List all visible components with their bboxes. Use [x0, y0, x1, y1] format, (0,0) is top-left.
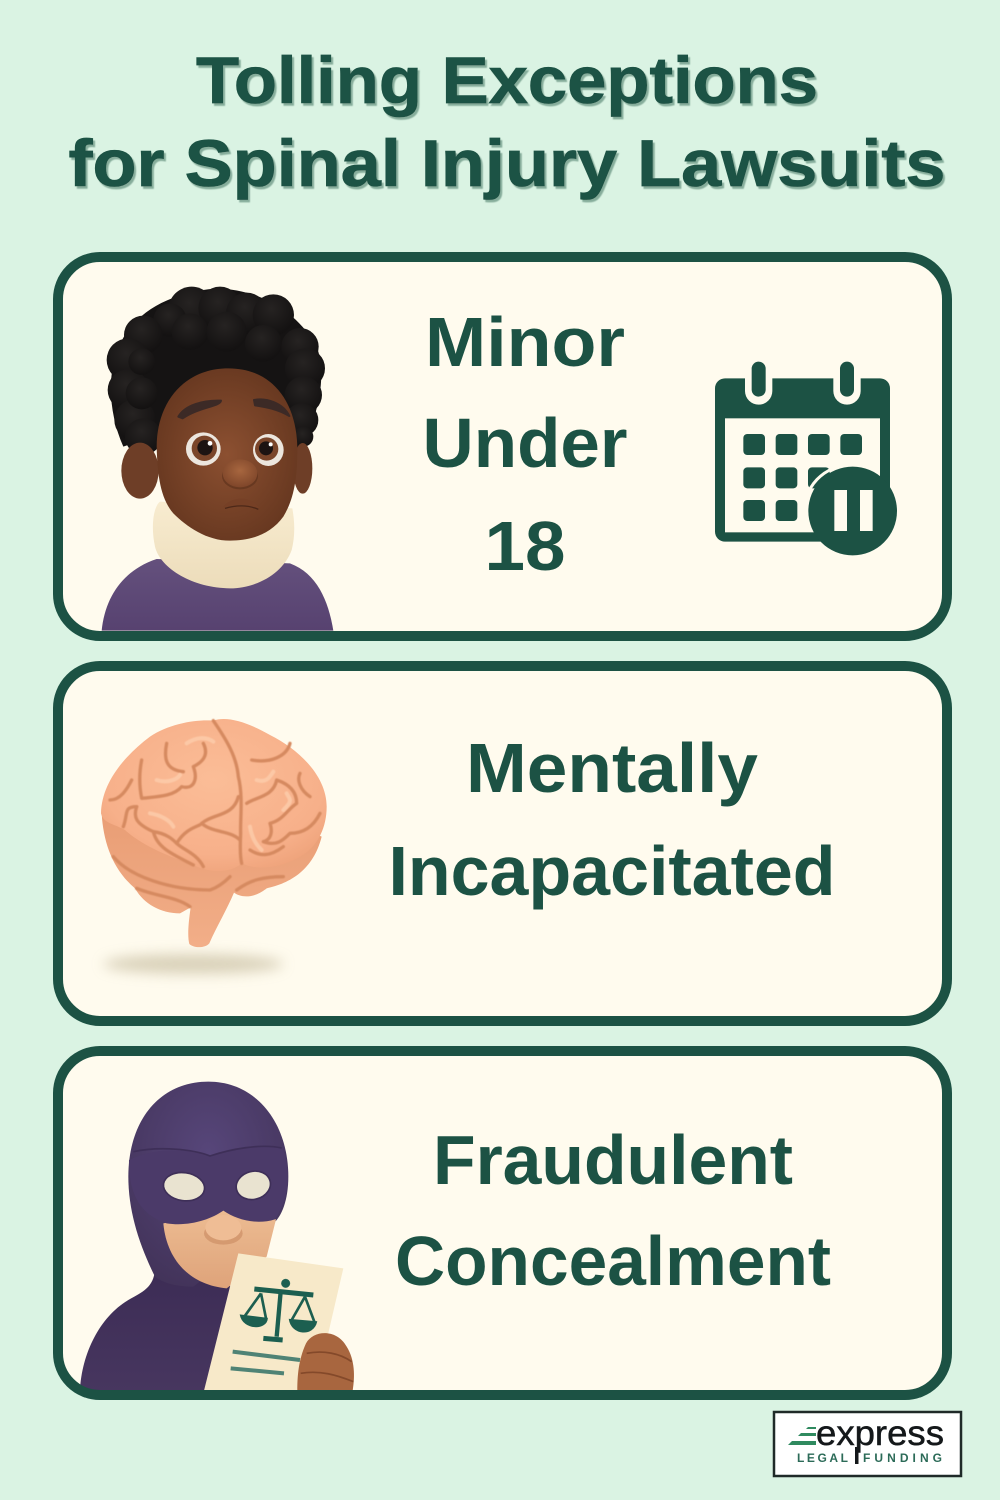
icon: calendar with pause: [715, 356, 897, 555]
title: for Spinal Injury Lawsuits: [68, 126, 945, 200]
illustration: masked figure with legal document: [80, 1082, 354, 1391]
illustration: brain: [101, 719, 327, 974]
text: Minor Under 18: Under: [422, 404, 628, 482]
logo tagline: legal: LEGAL: [797, 1451, 848, 1465]
text: Minor Under 18: [422, 303, 628, 585]
text: Mentally Incapacitated: [388, 729, 836, 910]
icon: logo stripes: [788, 1427, 816, 1445]
logo: Express Legal Funding: [774, 1412, 961, 1476]
logo tagline: funding: FUNDING: [863, 1451, 942, 1465]
text: Minor Under 18: Minor: [425, 303, 625, 381]
text: Minor Under 18: 18: [484, 507, 566, 585]
title: [68, 43, 945, 200]
logo wordmark: express: [816, 1414, 944, 1453]
title: Tolling Exceptions: [196, 43, 818, 117]
panel: fraudulent concealment: [58, 1051, 947, 1395]
panel: minor under 18: [58, 257, 947, 636]
text: Mentally Incapacitated: Incapacitated: [388, 832, 836, 910]
text: Fraudulent Concealment: Concealment: [395, 1222, 831, 1300]
illustration: boy with neck collar: [102, 287, 333, 631]
logo p stem: [855, 1447, 858, 1464]
text: Mentally Incapacitated: Mentally: [466, 729, 758, 807]
panel: mentally incapacitated: [58, 666, 947, 1021]
text: Fraudulent Concealment: [395, 1121, 831, 1300]
text: Fraudulent Concealment: Fraudulent: [433, 1121, 793, 1199]
